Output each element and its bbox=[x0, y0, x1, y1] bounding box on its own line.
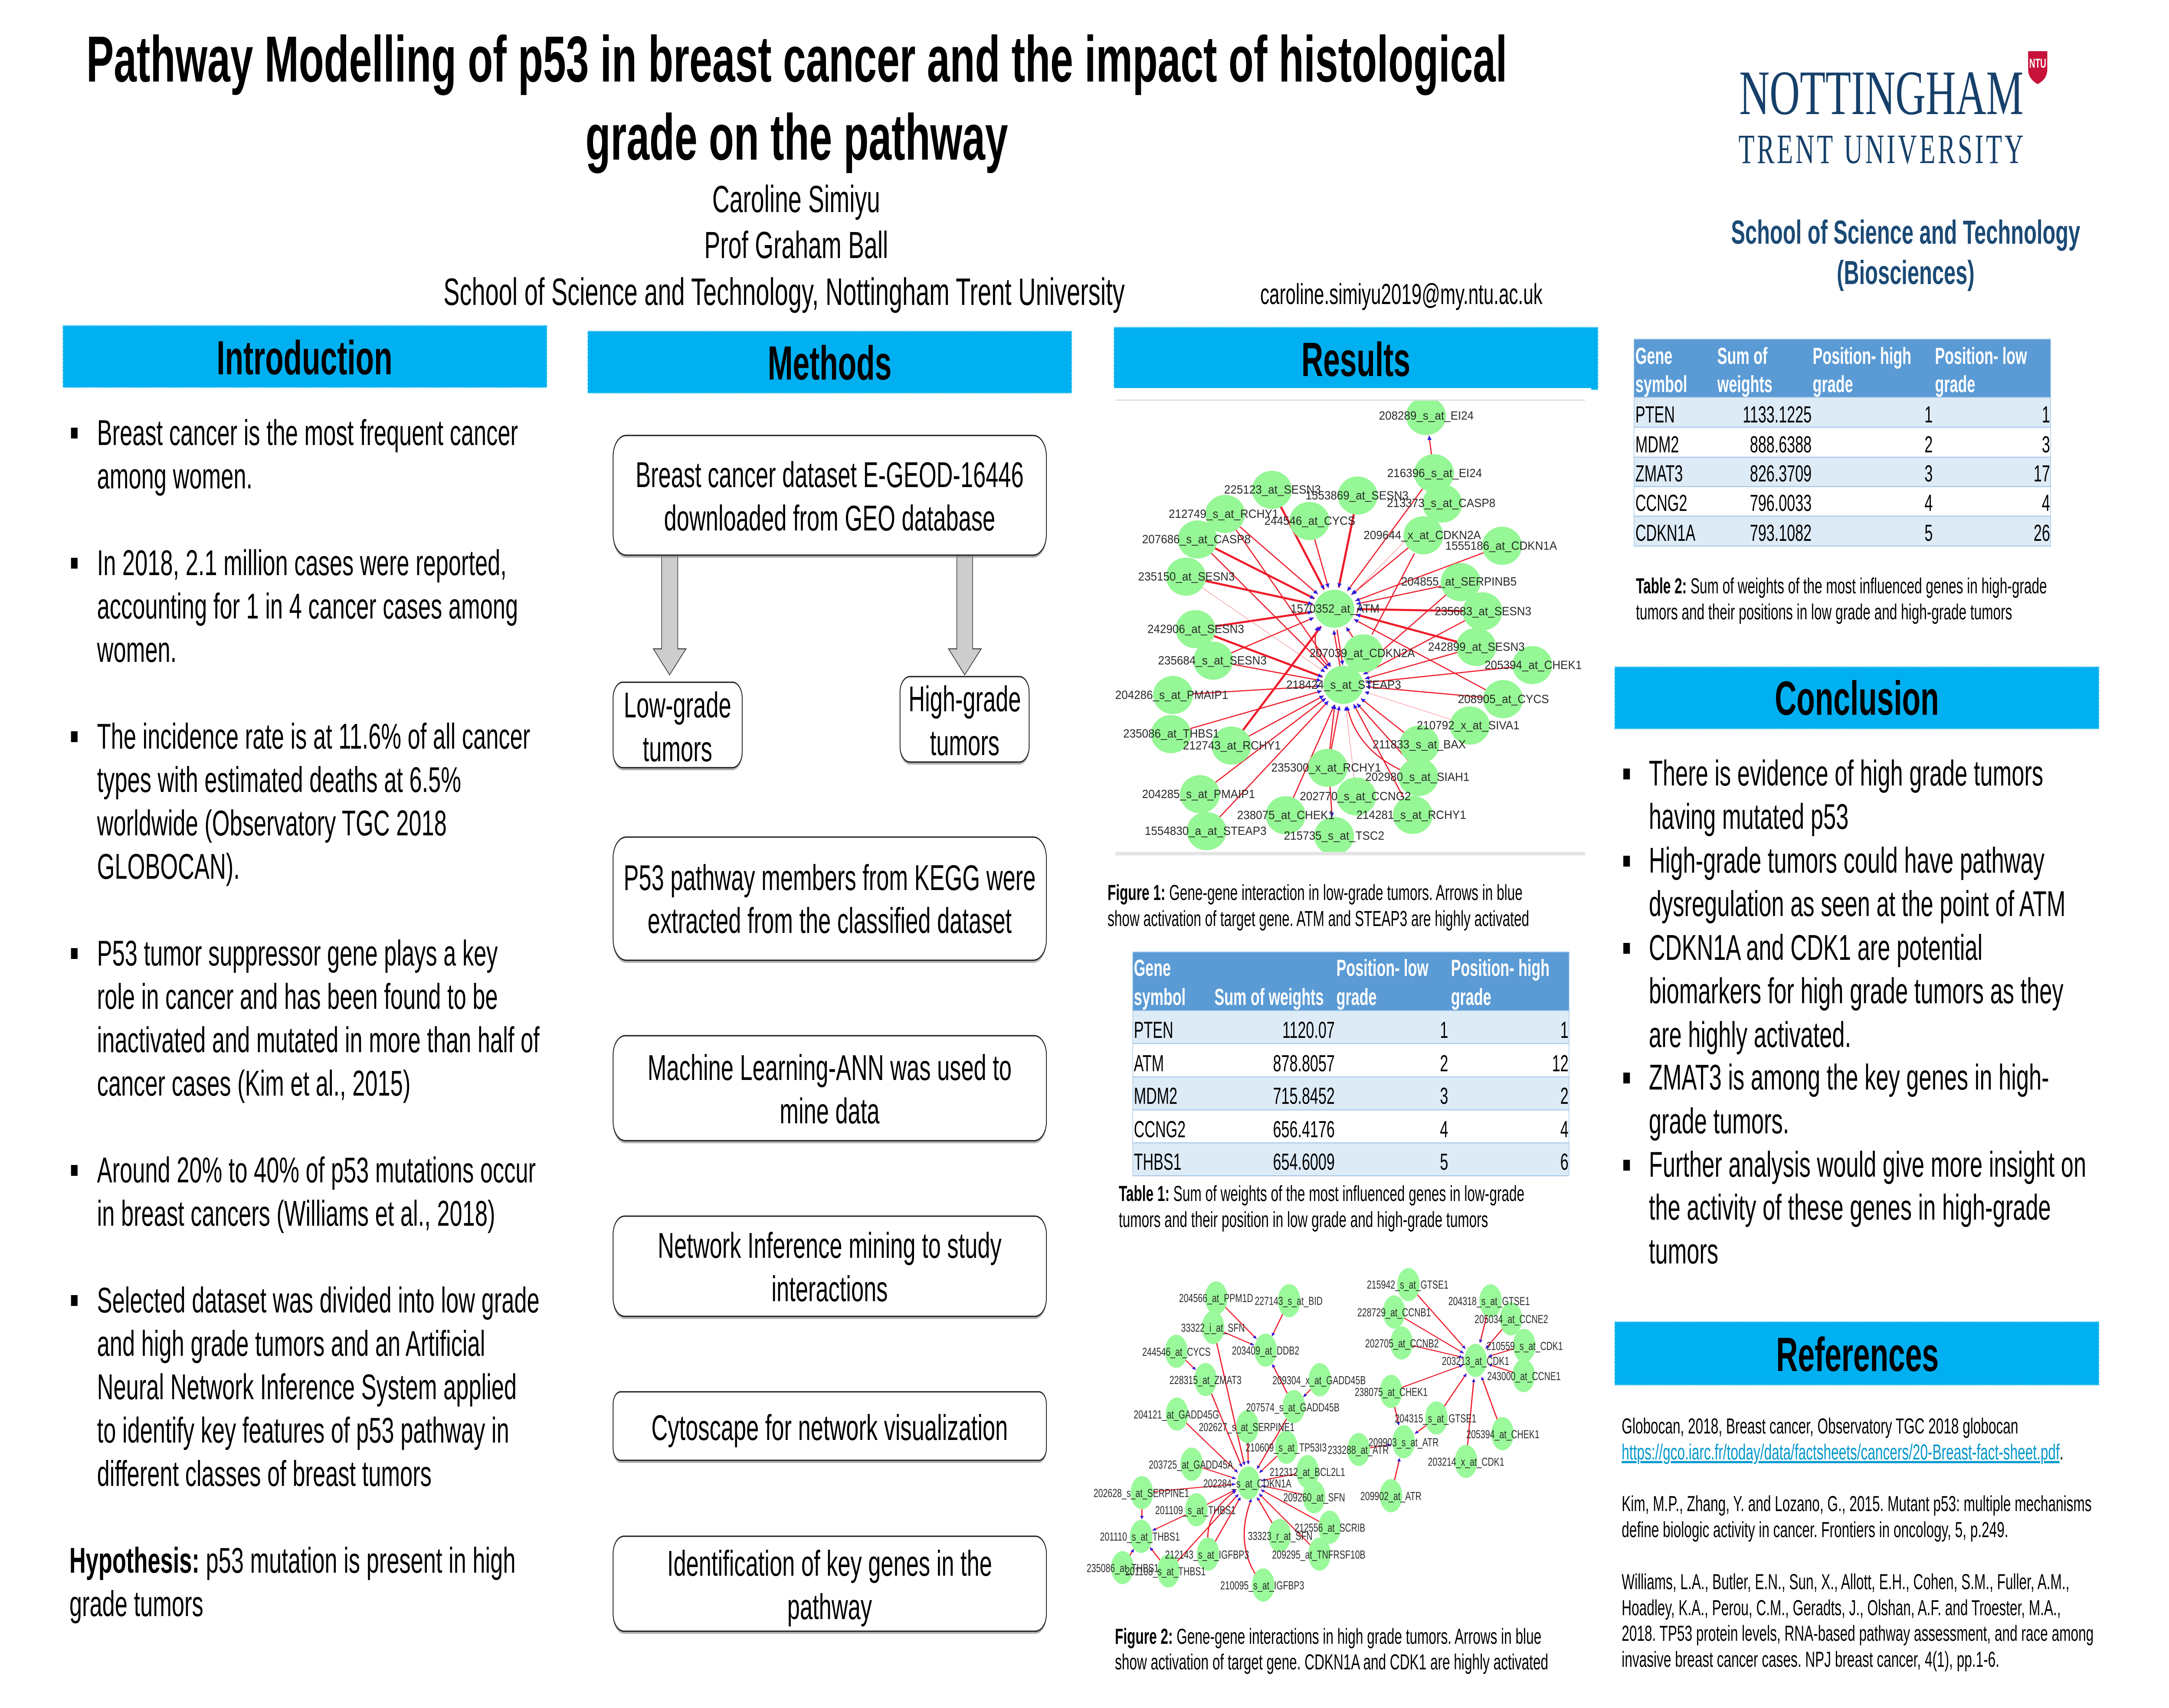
table 1: low-grade sum of weights: symbol bbox=[1134, 984, 1186, 1010]
network labels: 33323_r_at_SFN bbox=[1248, 1530, 1313, 1542]
network labels: 209295_at_TNFRSF10B bbox=[1272, 1548, 1366, 1561]
network labels: 204315_s_at_GTSE1 bbox=[1395, 1412, 1476, 1425]
network labels: 33322_i_at_SFN bbox=[1181, 1321, 1245, 1334]
heading: references: References bbox=[1776, 1328, 1939, 1381]
network labels: 235683_at_SESN3 bbox=[1435, 605, 1531, 618]
network labels: 201108_s_at_THBS1 bbox=[1125, 1565, 1206, 1578]
logo: Nottingham Trent University: NOTTINGHAM bbox=[1739, 58, 2024, 128]
bullet list: introduction: to identify key features of p53 pathway in bbox=[97, 1410, 509, 1450]
table 1: low-grade sum of weights: 715.8452 bbox=[1273, 1083, 1335, 1109]
table 2: high-grade sum of weights: 793.1082 bbox=[1750, 520, 1812, 546]
network labels: 215735_s_at_TSC2 bbox=[1284, 829, 1384, 842]
network labels: 204566_at_PPM1D bbox=[1179, 1292, 1253, 1305]
bullet list: conclusion: Further analysis would give more insight on bbox=[1649, 1144, 2086, 1184]
flow box: low-grade tumors: tumors bbox=[643, 729, 712, 769]
network labels: 202628_s_at_SERPINE1 bbox=[1094, 1487, 1189, 1499]
flow box: key genes bbox=[613, 1536, 1046, 1634]
table 2: high-grade sum of weights: 5 bbox=[1924, 520, 1933, 546]
flow box: high-grade tumors: High-grade bbox=[908, 679, 1021, 719]
reference list: 2018. TP53 protein levels, RNA-based pathway assessment, and race among bbox=[1622, 1621, 2094, 1646]
network labels: 238075_at_CHEK1 bbox=[1355, 1385, 1428, 1398]
table 1: low-grade sum of weights: 5 bbox=[1440, 1148, 1448, 1175]
authors and affiliation: Caroline Simiyu bbox=[712, 178, 880, 220]
flow box: machine learning: mine data bbox=[780, 1091, 880, 1131]
bullet list: conclusion bbox=[1623, 753, 2086, 1271]
network nodes bbox=[1111, 1268, 1536, 1602]
network edges bbox=[1123, 1285, 1524, 1585]
table 2: high-grade sum of weights: symbol bbox=[1635, 371, 1687, 397]
table 1: low-grade sum of weights: 4 bbox=[1440, 1116, 1448, 1142]
table 1: low-grade sum of weights: 2 bbox=[1560, 1083, 1569, 1109]
table 2: high-grade sum of weights: Position- high bbox=[1813, 343, 1911, 369]
bullet list: introduction: accounting for 1 in 4 cancer cases among bbox=[97, 586, 518, 626]
table 2: high-grade sum of weights: CDKN1A bbox=[1635, 520, 1696, 546]
bullet list: introduction: Neural Network Inference System applied bbox=[97, 1367, 517, 1407]
school heading: (Biosciences) bbox=[1837, 253, 1975, 291]
table 2: high-grade sum of weights: MDM2 bbox=[1635, 431, 1679, 458]
table 2: high-grade sum of weights: 826.3709 bbox=[1750, 460, 1812, 487]
title: Pathway Modelling of p53 in breast cancer and the impact of histological bbox=[86, 23, 1507, 95]
network labels: 212556_at_SCRIB bbox=[1294, 1521, 1365, 1534]
table 1 caption: Table 1: Sum of weights of the most influenced genes in low-grade bbox=[1119, 1181, 1524, 1206]
table 2: high-grade sum of weights: 888.6388 bbox=[1750, 431, 1812, 458]
table 1: low-grade sum of weights: 3 bbox=[1440, 1083, 1448, 1109]
bullet list: introduction: In 2018, 2.1 million cases were reported, bbox=[97, 543, 507, 583]
table 1: low-grade sum of weights: grade bbox=[1337, 984, 1377, 1010]
network edges bbox=[1171, 436, 1532, 831]
bullet list: introduction: inactivated and mutated in more than half of bbox=[97, 1020, 540, 1060]
network labels: 242906_at_SESN3 bbox=[1147, 622, 1244, 636]
flow box: network inference: interactions bbox=[771, 1269, 888, 1309]
network labels: 1570352_at_ATM bbox=[1291, 602, 1379, 615]
table 1: low-grade sum of weights: 1 bbox=[1560, 1017, 1569, 1043]
table 1 caption: tumors and their position in low grade and high-grade tumors bbox=[1119, 1207, 1488, 1232]
logo: Nottingham Trent University: TRENT UNIVERSITY bbox=[1738, 126, 2024, 173]
table 1: low-grade sum of weights: 12 bbox=[1552, 1050, 1569, 1076]
network labels: 218424_s_at_STEAP3 bbox=[1286, 678, 1401, 691]
flow box: cytoscape bbox=[613, 1392, 1046, 1463]
flow box: high-grade tumors: tumors bbox=[930, 723, 999, 763]
figure 2: high-grade gene network bbox=[1087, 1268, 1563, 1602]
flow box: KEGG extraction bbox=[613, 837, 1046, 963]
heading: conclusion: Conclusion bbox=[1775, 672, 1939, 725]
school heading: School of Science and Technology bbox=[1731, 213, 2080, 251]
table 2: high-grade sum of weights: 3 bbox=[2042, 431, 2050, 458]
network labels: 205394_at_CHEK1 bbox=[1466, 1428, 1540, 1441]
network labels: 209304_x_at_GADD45B bbox=[1272, 1374, 1366, 1387]
network labels bbox=[1115, 409, 1582, 842]
flow box: dataset: downloaded from GEO database bbox=[664, 498, 995, 538]
table 2: high-grade sum of weights: 2 bbox=[1924, 431, 1933, 458]
network labels: 208905_at_CYCS bbox=[1458, 692, 1549, 706]
hypothesis: Hypothesis: p53 mutation is present in high bbox=[69, 1540, 516, 1580]
figure 1 caption bbox=[1107, 880, 1529, 931]
table 2: high-grade sum of weights: 26 bbox=[2034, 520, 2050, 546]
table 2 caption: Table 2: Sum of weights of the most influenced genes in high-grade bbox=[1636, 574, 2047, 598]
table 1: low-grade sum of weights: 6 bbox=[1560, 1148, 1569, 1175]
bullet list: conclusion: having mutated p53 bbox=[1649, 796, 1848, 837]
table 1: low-grade sum of weights: Sum of weights bbox=[1214, 984, 1324, 1010]
bullet list: conclusion: are highly activated. bbox=[1649, 1014, 1851, 1055]
table 1: low-grade sum of weights: THBS1 bbox=[1134, 1148, 1182, 1175]
bullet list: introduction: Breast cancer is the most frequent cancer bbox=[97, 412, 518, 453]
flow box: key genes: pathway bbox=[787, 1587, 872, 1627]
network labels: 209644_x_at_CDKN2A bbox=[1363, 528, 1481, 542]
network labels: 202284_s_at_CDKN1A bbox=[1203, 1477, 1291, 1490]
flow box: machine learning: Machine Learning-ANN was used to bbox=[648, 1047, 1012, 1088]
network labels: 202627_s_at_SERPINE1 bbox=[1199, 1420, 1294, 1433]
bullet list: conclusion: There is evidence of high grade tumors bbox=[1649, 753, 2043, 793]
reference list: Kim, M.P., Zhang, Y. and Lozano, G., 2015. Mutant p53: multiple mechanisms bbox=[1622, 1492, 2092, 1516]
flow box: KEGG extraction: extracted from the classified dataset bbox=[648, 900, 1012, 941]
panel: results bbox=[1087, 327, 1598, 1674]
table 1: low-grade sum of weights: 4 bbox=[1560, 1116, 1569, 1142]
contact email: caroline.simiyu2019@my.ntu.ac.uk bbox=[1260, 278, 1543, 310]
network labels: 210095_s_at_IGFBP3 bbox=[1220, 1579, 1304, 1592]
network labels: 244546_at_CYCS bbox=[1265, 514, 1355, 527]
table 1: low-grade sum of weights: 878.8057 bbox=[1273, 1050, 1335, 1076]
bullet list: introduction: Selected dataset was divided into low grade bbox=[97, 1280, 540, 1320]
bullet list: conclusion: High-grade tumors could have pathway bbox=[1649, 840, 2044, 880]
network labels: 209903_s_at_ATR bbox=[1369, 1436, 1438, 1449]
network labels: 207574_s_at_GADD45B bbox=[1246, 1401, 1340, 1414]
panel: introduction bbox=[63, 326, 547, 1624]
heading: methods bbox=[588, 331, 1071, 393]
authors and affiliation: Prof Graham Ball bbox=[704, 224, 888, 266]
network labels: 212743_at_RCHY1 bbox=[1183, 739, 1281, 752]
flow box: dataset bbox=[613, 435, 1046, 558]
bullet list: introduction: The incidence rate is at 11.6% of all cancer bbox=[97, 716, 530, 756]
network labels: 211833_s_at_BAX bbox=[1373, 738, 1466, 751]
figure 2 caption: Figure 2: Gene-gene interactions in high grade tumors. Arrows in blue bbox=[1115, 1624, 1541, 1649]
reference list: invasive breast cancer cases. NPJ breast cancer, 4(1), pp.1-6. bbox=[1622, 1647, 1999, 1672]
hypothesis bbox=[69, 1540, 516, 1624]
bullet list: introduction: different classes of breast tumors bbox=[97, 1453, 432, 1494]
network labels: 243000_at_CCNE1 bbox=[1487, 1370, 1561, 1383]
table 2: high-grade sum of weights: 4 bbox=[2042, 490, 2050, 516]
logo: Nottingham Trent University: NTU bbox=[2029, 56, 2046, 71]
bullet list: conclusion: dysregulation as seen at the point of ATM bbox=[1649, 883, 2066, 924]
network labels: 204121_at_GADD45G bbox=[1134, 1408, 1219, 1421]
table 1 caption bbox=[1119, 1181, 1524, 1232]
network labels: 202770_s_at_CCNG2 bbox=[1300, 789, 1411, 803]
table 2: high-grade sum of weights: 1133.1225 bbox=[1743, 401, 1812, 428]
table 2 caption: tumors and their positions in low grade and high-grade tumors bbox=[1636, 600, 2012, 624]
network labels: 235150_at_SESN3 bbox=[1138, 570, 1235, 583]
network labels: 233288_at_ATR bbox=[1327, 1443, 1389, 1456]
table 2: high-grade sum of weights: grade bbox=[1813, 371, 1853, 397]
heading: methods: Methods bbox=[768, 337, 891, 390]
network labels: 209260_at_SFN bbox=[1283, 1491, 1345, 1504]
table 2: high-grade sum of weights: 4 bbox=[1924, 490, 1933, 516]
bullet list: introduction: Around 20% to 40% of p53 mutations occur bbox=[97, 1150, 536, 1190]
table 2: high-grade sum of weights bbox=[1634, 339, 2051, 546]
table 2: high-grade sum of weights: Sum of bbox=[1717, 343, 1768, 369]
bullet list: introduction: and high grade tumors and an Artificial bbox=[97, 1323, 485, 1364]
table 1: low-grade sum of weights: 654.6009 bbox=[1273, 1148, 1335, 1175]
network labels: 205394_at_CHEK1 bbox=[1484, 658, 1582, 672]
bullet list: introduction: among women. bbox=[97, 456, 252, 496]
network labels: 204286_s_at_PMAIP1 bbox=[1115, 688, 1228, 701]
flow box: high-grade tumors bbox=[900, 677, 1029, 765]
table 2: high-grade sum of weights: 1 bbox=[1924, 401, 1933, 428]
network labels: 244546_at_CYCS bbox=[1142, 1345, 1211, 1358]
network labels: 214281_s_at_RCHY1 bbox=[1356, 808, 1466, 821]
panel: methods bbox=[588, 331, 1071, 1634]
bullet list: conclusion: ZMAT3 is among the key genes in high- bbox=[1649, 1057, 2049, 1097]
school heading bbox=[1731, 213, 2080, 291]
network labels: 203725_at_GADD45A bbox=[1149, 1458, 1233, 1471]
bullet list: introduction: cancer cases (Kim et al., 2015) bbox=[97, 1063, 410, 1103]
network labels: 202705_at_CCNB2 bbox=[1365, 1337, 1438, 1350]
authors and affiliation: School of Science and Technology, Nottingham Trent University bbox=[443, 270, 1125, 313]
bullet list: introduction: worldwide (Observatory TGC 2018 bbox=[97, 803, 447, 843]
bullet list: conclusion: biomarkers for high grade tumors as they bbox=[1649, 971, 2064, 1011]
table 1: low-grade sum of weights: Position- low bbox=[1337, 955, 1429, 981]
bullet list: introduction: women. bbox=[97, 629, 177, 670]
figure 1 caption: show activation of target gene. ATM and STEAP3 are highly activated bbox=[1107, 906, 1529, 931]
network labels: 204855_at_SERPINB5 bbox=[1401, 575, 1517, 588]
network labels: 203409_at_DDB2 bbox=[1232, 1344, 1299, 1357]
panel: references bbox=[1615, 1322, 2099, 1672]
bullet list: introduction: in breast cancers (Williams et al., 2018) bbox=[97, 1193, 495, 1234]
reference list: Williams, L.A., Butler, E.N., Sun, X., Allott, E.H., Cohen, S.M., Fuller, A.M., bbox=[1622, 1570, 2069, 1594]
network labels: 216396_s_at_EI24 bbox=[1387, 466, 1482, 480]
bullet list: introduction: GLOBOCAN). bbox=[97, 846, 240, 887]
bullet list: introduction: P53 tumor suppressor gene plays a key bbox=[97, 933, 498, 973]
table 2: high-grade sum of weights: Position- low bbox=[1935, 343, 2027, 369]
network labels: 208289_s_at_EI24 bbox=[1379, 409, 1474, 422]
table 2: high-grade sum of weights: 796.0033 bbox=[1750, 490, 1812, 516]
network labels: 235086_at_THBS1 bbox=[1123, 727, 1219, 740]
network labels: 201110_s_at_THBS1 bbox=[1100, 1530, 1180, 1543]
table 2: high-grade sum of weights: CCNG2 bbox=[1635, 490, 1687, 516]
network labels: 210792_x_at_SIVA1 bbox=[1417, 719, 1520, 732]
reference list: Hoadley, K.A., Perou, C.M., Geradts, J., Olshan, A.F. and Troester, M.A., bbox=[1622, 1596, 2061, 1620]
network labels: 1555186_at_CDKN1A bbox=[1445, 539, 1557, 553]
flow box: key genes: Identification of key genes in the bbox=[667, 1543, 992, 1584]
network labels: 203214_x_at_CDK1 bbox=[1428, 1456, 1504, 1468]
network labels: 225123_at_SESN3 bbox=[1224, 483, 1321, 496]
table 1: low-grade sum of weights: 656.4176 bbox=[1273, 1116, 1335, 1142]
network labels: 212143_s_at_IGFBP3 bbox=[1165, 1548, 1249, 1561]
network labels: 1553869_at_SESN3 bbox=[1305, 489, 1409, 502]
authors and affiliation bbox=[443, 178, 1125, 313]
figure 2 caption: show activation of target gene. CDKN1A and CDK1 are highly activated bbox=[1115, 1650, 1548, 1674]
hypothesis: grade tumors bbox=[69, 1584, 203, 1624]
logo: Nottingham Trent University bbox=[1738, 51, 2047, 173]
heading: results: Results bbox=[1301, 334, 1410, 386]
network labels: 215942_s_at_GTSE1 bbox=[1367, 1278, 1448, 1291]
bullet list: conclusion: the activity of these genes in high-grade bbox=[1649, 1187, 2051, 1227]
arrow: to high-grade tumors bbox=[949, 555, 981, 675]
network labels: 227143_s_at_BID bbox=[1255, 1294, 1323, 1307]
heading: results bbox=[1114, 327, 1598, 389]
table 2: high-grade sum of weights: Gene bbox=[1635, 343, 1672, 369]
figure 2 caption bbox=[1115, 1624, 1548, 1674]
bullet list: conclusion: tumors bbox=[1649, 1231, 1718, 1271]
network labels: 235684_s_at_SESN3 bbox=[1158, 654, 1267, 667]
network labels bbox=[1087, 1278, 1563, 1592]
network labels: 210559_s_at_CDK1 bbox=[1487, 1339, 1563, 1352]
flow box: KEGG extraction: P53 pathway members from KEGG were bbox=[624, 857, 1035, 898]
table 1: low-grade sum of weights: 2 bbox=[1440, 1050, 1448, 1076]
table 1: low-grade sum of weights: PTEN bbox=[1134, 1017, 1173, 1043]
flow box: network inference bbox=[613, 1216, 1046, 1319]
network labels: 212749_s_at_RCHY1 bbox=[1169, 507, 1278, 520]
bullet list: conclusion: grade tumors. bbox=[1649, 1101, 1789, 1141]
panel: conclusion bbox=[1615, 667, 2099, 1271]
table 1: low-grade sum of weights: 1120.07 bbox=[1282, 1017, 1335, 1043]
network labels: 204285_s_at_PMAIP1 bbox=[1142, 787, 1255, 801]
network labels: 228729_at_CCNB1 bbox=[1357, 1306, 1431, 1319]
flow box: network inference: Network Inference mining to study bbox=[658, 1225, 1002, 1266]
network labels: 202980_s_at_SIAH1 bbox=[1365, 770, 1469, 784]
table 1: low-grade sum of weights: CCNG2 bbox=[1134, 1116, 1186, 1142]
network labels: 228315_at_ZMAT3 bbox=[1170, 1374, 1242, 1387]
bullet list: introduction: role in cancer and has been found to be bbox=[97, 976, 498, 1017]
table 1: low-grade sum of weights bbox=[1133, 952, 1569, 1176]
title: grade on the pathway bbox=[586, 101, 1008, 173]
flow box: cytoscape: Cytoscape for network visualization bbox=[652, 1407, 1008, 1448]
table 1: low-grade sum of weights: ATM bbox=[1134, 1050, 1164, 1076]
heading: introduction bbox=[63, 326, 547, 387]
flow box: low-grade tumors bbox=[613, 682, 742, 770]
table 2: high-grade sum of weights: 3 bbox=[1924, 460, 1933, 487]
table 2 caption bbox=[1636, 574, 2047, 624]
bullet list: conclusion: CDKN1A and CDK1 are potential bbox=[1649, 927, 1982, 968]
reference list bbox=[1622, 1414, 2094, 1672]
flow box: machine learning bbox=[613, 1036, 1046, 1143]
network labels: 203213_at_CDK1 bbox=[1442, 1355, 1509, 1368]
network labels: 238075_at_CHEK1 bbox=[1237, 808, 1334, 822]
network labels: 207686_s_at_CASP8 bbox=[1142, 533, 1251, 546]
reference list: define biologic activity in cancer. Frontiers in oncology, 5, p.249. bbox=[1622, 1518, 2008, 1542]
reference list: https://gco.iarc.fr/today/data/factsheets/cancers/20-Breast-fact-sheet.pdf. bbox=[1622, 1440, 2064, 1464]
table 2: high-grade sum of weights: weights bbox=[1717, 371, 1773, 397]
table 1: low-grade sum of weights: Position- high bbox=[1451, 955, 1550, 981]
reference list: Globocan, 2018, Breast cancer, Observatory TGC 2018 globocan bbox=[1622, 1414, 2018, 1438]
heading: conclusion bbox=[1615, 667, 2099, 729]
table 2: high-grade sum of weights: PTEN bbox=[1635, 401, 1675, 428]
network labels: 209902_at_ATR bbox=[1360, 1490, 1422, 1502]
table 2: high-grade sum of weights: 17 bbox=[2034, 460, 2050, 487]
figure 1: low-grade gene network bbox=[1110, 388, 1591, 855]
network labels: 205034_at_CCNE2 bbox=[1474, 1313, 1548, 1325]
arrow: to low-grade tumors bbox=[653, 555, 686, 675]
image frame strips bbox=[1110, 388, 1591, 855]
network labels: 242899_at_SESN3 bbox=[1428, 640, 1525, 654]
flow box: dataset: Breast cancer dataset E-GEOD-16446 bbox=[636, 455, 1024, 495]
network labels: 235300_x_at_RCHY1 bbox=[1271, 761, 1381, 774]
figure 1 caption: Figure 1: Gene-gene interaction in low-grade tumors. Arrows in blue bbox=[1107, 880, 1523, 905]
network labels: 213373_s_at_CASP8 bbox=[1387, 496, 1495, 510]
network labels: 1554830_a_at_STEAP3 bbox=[1145, 824, 1267, 838]
network labels: 212312_at_BCL2L1 bbox=[1270, 1466, 1345, 1479]
table 2: high-grade sum of weights: ZMAT3 bbox=[1635, 460, 1683, 487]
flow box: low-grade tumors: Low-grade bbox=[624, 685, 731, 725]
table 1: low-grade sum of weights: MDM2 bbox=[1134, 1083, 1177, 1109]
bullet list: introduction: types with estimated deaths at 6.5% bbox=[97, 759, 461, 800]
network labels: 204318_s_at_GTSE1 bbox=[1448, 1295, 1530, 1308]
table 1: low-grade sum of weights: grade bbox=[1451, 984, 1491, 1010]
network labels: 201109_s_at_THBS1 bbox=[1155, 1504, 1235, 1517]
table 1: low-grade sum of weights: Gene bbox=[1134, 955, 1171, 981]
network labels: 210609_s_at_TP53I3 bbox=[1245, 1441, 1327, 1454]
bullet list: introduction bbox=[71, 412, 540, 1494]
network nodes bbox=[1151, 397, 1552, 855]
table 1: low-grade sum of weights: 1 bbox=[1440, 1017, 1448, 1043]
title bbox=[86, 23, 1507, 173]
table 2: high-grade sum of weights: 1 bbox=[2042, 401, 2050, 428]
network labels: 235086_at_THBS1 bbox=[1087, 1562, 1159, 1574]
table 2: high-grade sum of weights: grade bbox=[1935, 371, 1975, 397]
network labels: 207039_at_CDKN2A bbox=[1310, 646, 1415, 660]
heading: introduction: Introduction bbox=[216, 332, 393, 385]
heading: references bbox=[1615, 1322, 2099, 1385]
